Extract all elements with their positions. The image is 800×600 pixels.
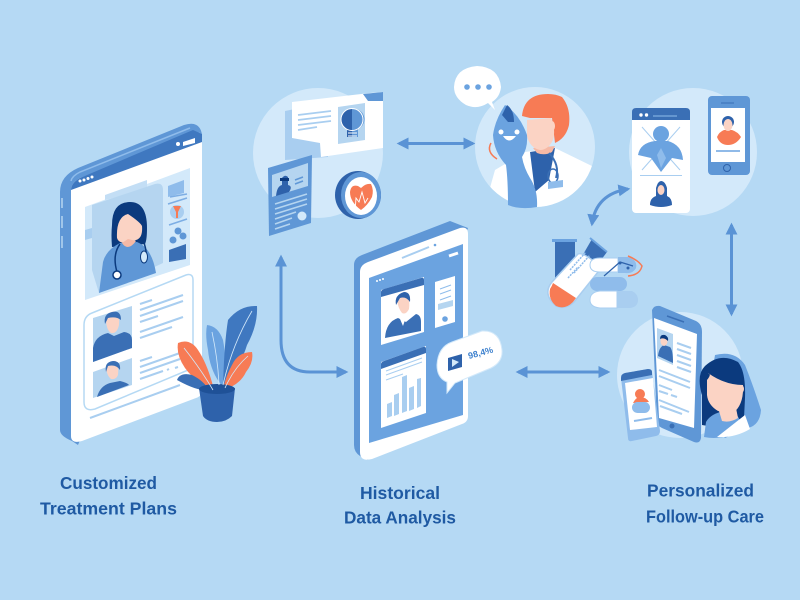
icon: heart badge	[335, 171, 381, 219]
label: treatment plans line: Treatment Plans	[40, 498, 177, 518]
label: customized treatment plans: Customized	[60, 473, 157, 493]
circle: doctor background	[475, 87, 595, 207]
phone: small profile	[621, 369, 660, 441]
phone: patient profile	[708, 96, 750, 175]
analyst card	[381, 277, 424, 345]
arrow: analysis to follow-up	[518, 370, 608, 374]
label: personalized: Personalized	[647, 480, 754, 500]
tablet: historical data analysis	[354, 221, 502, 460]
speech bubble: percent: 98,4%	[467, 345, 494, 361]
patient document	[268, 155, 312, 236]
doctor figure	[99, 202, 156, 293]
blue mascot	[489, 105, 537, 208]
patient list card	[84, 275, 193, 418]
label: follow-up care: Follow-up Care	[646, 506, 764, 526]
arrow: care to follow-up vertical	[730, 225, 733, 314]
lab tubes and pills	[548, 238, 642, 308]
phone: follow-up report	[652, 306, 702, 442]
anatomy card	[632, 108, 690, 213]
circle: records background	[253, 88, 383, 218]
speech bubble: percent	[437, 331, 502, 393]
woman portrait	[700, 354, 761, 438]
arrow: plans to analysis curved	[281, 257, 346, 372]
speech bubble	[454, 66, 501, 110]
doctor video panel	[85, 168, 190, 300]
phone: customized treatment plans	[60, 124, 202, 445]
side info card	[435, 276, 455, 328]
label: data analysis: Data Analysis	[344, 508, 456, 528]
icon: lightbulb	[341, 108, 364, 137]
doctor illustration	[454, 66, 600, 215]
label: historical: Historical	[360, 483, 440, 503]
arrow: care to lab	[592, 189, 628, 224]
arrow: records to doctor	[399, 142, 473, 145]
bar chart card	[381, 346, 426, 428]
circle: follow-up background	[617, 312, 743, 438]
circle: right top background	[629, 88, 757, 216]
records illustration	[268, 92, 383, 236]
side icons	[168, 180, 187, 262]
icon: potted plant	[177, 306, 257, 422]
